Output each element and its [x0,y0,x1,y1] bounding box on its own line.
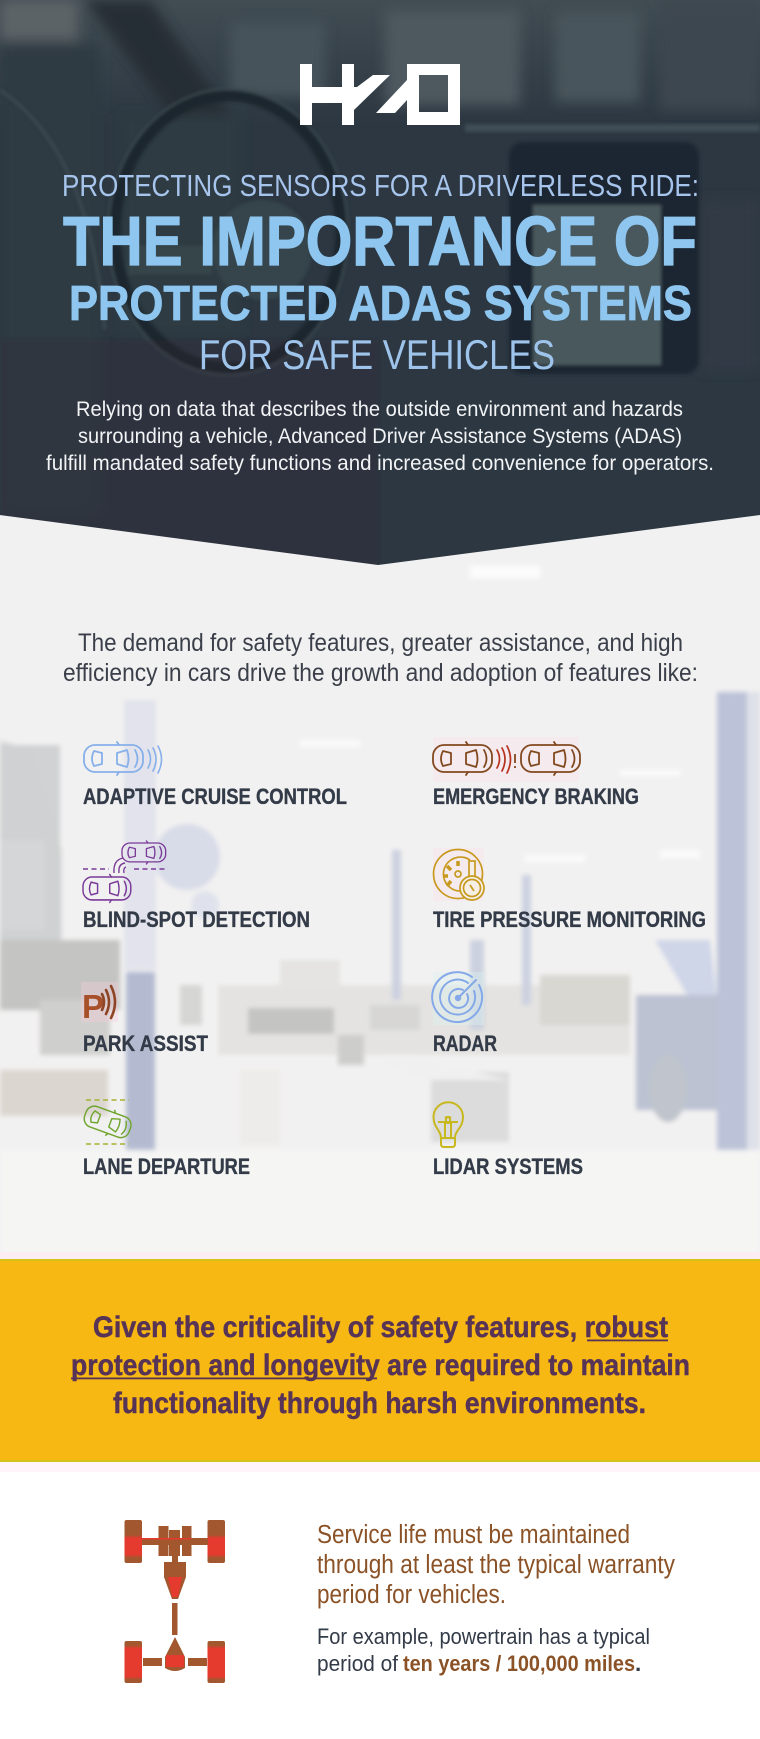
heading: for safe vehicles: FOR SAFE VEHICLES [199,331,555,378]
callout band: yellow [0,1252,760,1472]
callout text: protection and longevity are required to maintain [71,1349,690,1382]
feature: lane departure: LANE DEPARTURE [83,1154,250,1179]
icon: blind-spot cars [83,841,167,902]
feature: park assist [81,982,208,1056]
intro paragraph [46,397,714,475]
background: workshop photo [0,500,760,1260]
feature: park assist: PARK ASSIST [83,1031,208,1056]
feature: radar [432,972,497,1056]
heading: protected ADAS systems: PROTECTED ADAS SYSTEMS [69,277,692,331]
callout text: functionality through harsh environments. [113,1387,646,1420]
icon: lane departure car [81,1100,134,1144]
text block: powertrain example [317,1624,650,1676]
feature: blind-spot detection: BLIND-SPOT DETECTION [83,907,310,932]
text block: powertrain example: For example, powertrain has a typical [317,1624,650,1649]
callout text [71,1311,690,1420]
feature: blind-spot detection [83,841,310,932]
text block: service life [317,1521,675,1609]
feature: lidar systems [433,1102,583,1179]
icon: emergency braking cars [433,737,580,782]
feature: radar: RADAR [433,1031,497,1056]
feature: adaptive cruise control: ADAPTIVE CRUISE CONTROL [83,784,347,809]
icon: adaptive cruise car [84,742,162,775]
feature: emergency braking: EMERGENCY BRAKING [433,784,639,809]
intro paragraph: fulfill mandated safety functions and increased convenience for operators. [46,451,714,475]
icon: light bulb [434,1102,463,1147]
icon: tire with gauge [433,848,484,901]
demand text block [63,629,698,687]
intro paragraph: surrounding a vehicle, Advanced Driver Assistance Systems (ADAS) [78,424,682,448]
demand text block: efficiency in cars drive the growth and adoption of features like: [63,659,698,687]
icon: powertrain chassis [124,1520,225,1683]
icon: parking P with waves: P [82,988,104,1025]
text block: service life: period for vehicles. [317,1581,506,1609]
feature: tire pressure monitoring [433,848,706,932]
text block: service life: through at least the typical warranty [317,1551,675,1579]
demand text block: The demand for safety features, greater assistance, and high [78,629,683,657]
feature: emergency braking [433,737,639,809]
logo: H2O [300,64,460,125]
header: dark car interior photo [0,0,760,580]
feature: tire pressure monitoring: TIRE PRESSURE MONITORING [433,907,706,932]
feature: lane departure [81,1100,250,1179]
callout text: Given the criticality of safety features, robust [93,1311,668,1344]
text block: service life: Service life must be maintained [317,1521,630,1549]
feature: adaptive cruise control [83,742,347,809]
icon: radar [432,972,484,1025]
intro paragraph: Relying on data that describes the outside environment and hazards [76,397,683,421]
text block: powertrain example: period of [317,1651,399,1676]
feature: lidar systems: LIDAR SYSTEMS [433,1154,583,1179]
text block: powertrain example: ten years / 100,000 miles [403,1651,635,1676]
text block: powertrain example: . [635,1651,641,1676]
